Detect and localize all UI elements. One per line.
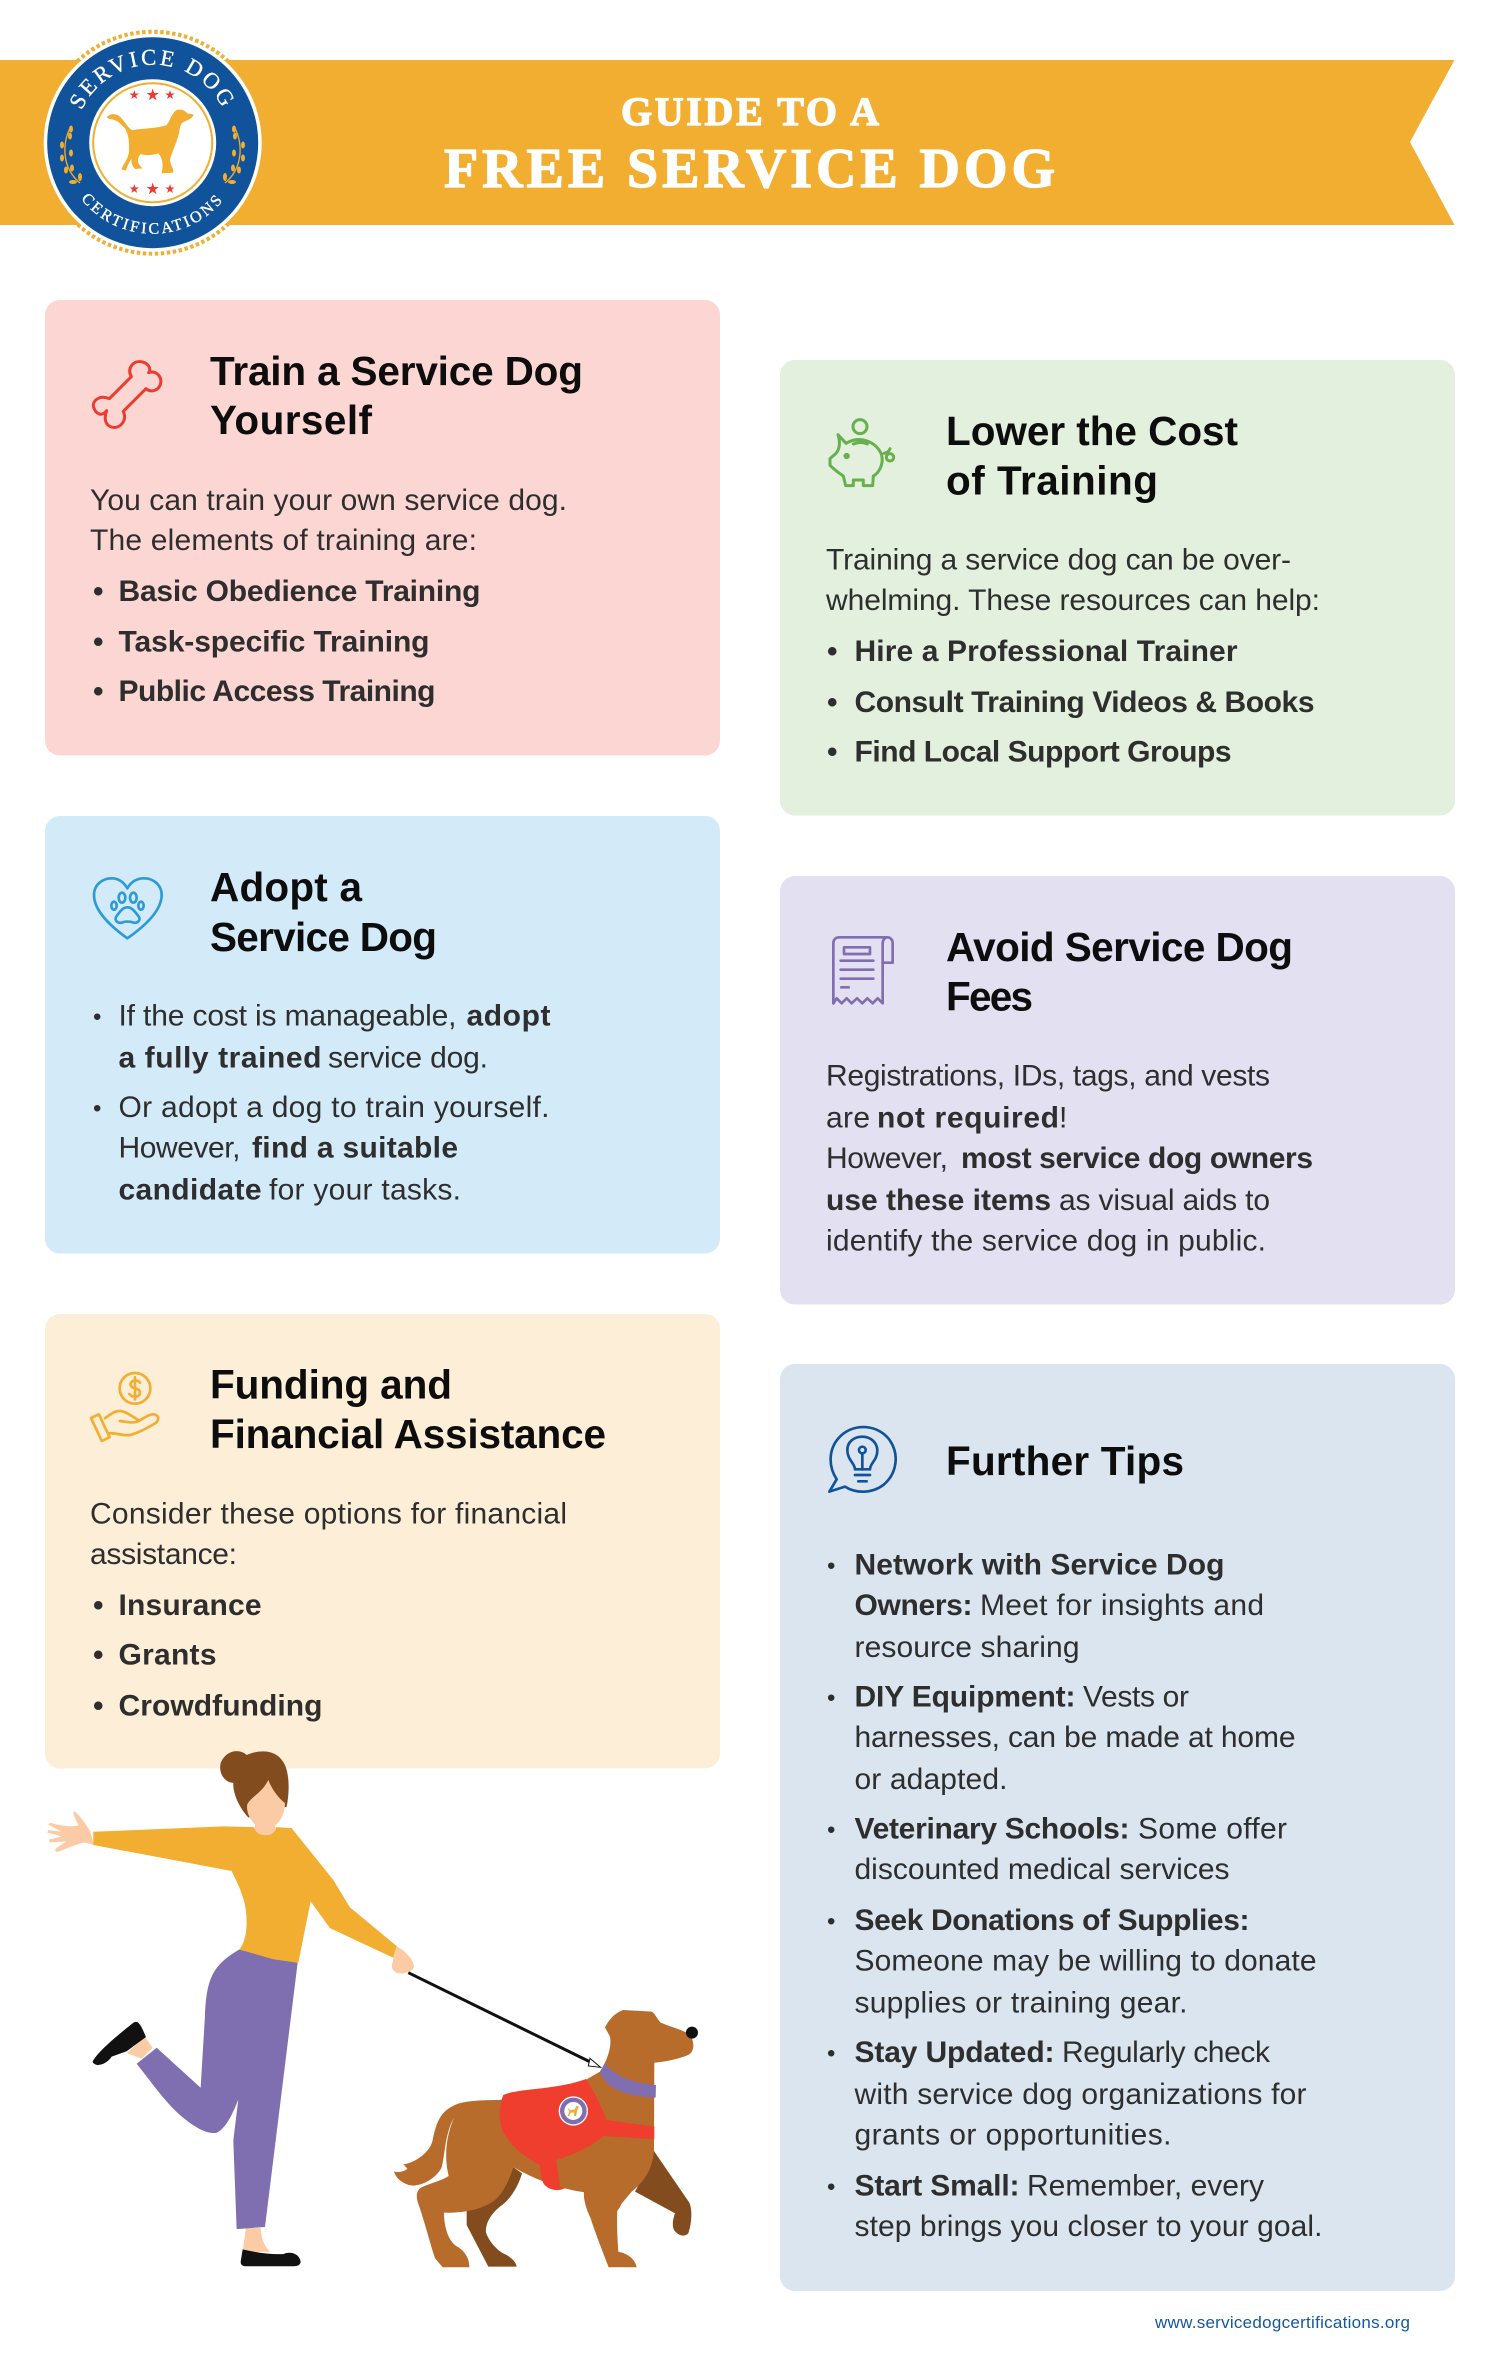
list: adoption options: adopt [466, 1000, 550, 1032]
list: further tips: Someone may be willing to donate [854, 1944, 1316, 1978]
text: fees explanation: However, [826, 1142, 948, 1175]
text: training intro: You can train your own service dog. [90, 484, 567, 517]
heading: lower the cost of training: Lower the Cost [946, 408, 1238, 454]
list: further tips: supplies or training gear. [854, 1986, 1188, 2020]
sweater [93, 1826, 397, 1963]
list: further tips [827, 1548, 1322, 2243]
heading: train a service dog yourself: Train a Service Dog [210, 348, 583, 394]
list: further tips: • [827, 1684, 835, 1712]
list: further tips: • [827, 2174, 835, 2200]
panel: adopt a service dog [45, 816, 720, 1254]
text: financial assistance intro [90, 1498, 567, 1571]
list: adoption options: • [93, 1095, 101, 1122]
panel: further tips [780, 1364, 1455, 2291]
list: adoption options: Or adopt a dog to train yourself. [118, 1091, 550, 1124]
list: adoption options: candidate [118, 1174, 262, 1206]
hair [220, 1751, 289, 1817]
text: fees explanation: not required [877, 1102, 1059, 1134]
vest badge [559, 2096, 588, 2126]
list: funding options: Insurance [118, 1589, 262, 1622]
list: adoption options: If the cost is manageable, [118, 1000, 456, 1032]
face and neck [247, 1780, 285, 1838]
title: FREE SERVICE DOG [444, 138, 1055, 200]
list: elements of training: Task-specific Training [118, 625, 430, 658]
heading: funding and financial assistance [210, 1362, 606, 1457]
heading: lower the cost of training: of Training [946, 458, 1158, 504]
list: funding options: • [93, 1638, 104, 1672]
list: further tips: Seek Donations of Supplies: [854, 1904, 1250, 1937]
text: financial assistance intro: assistance: [90, 1538, 237, 1571]
list: adoption options: • [93, 1004, 101, 1030]
trousers [137, 1950, 298, 2229]
list: further tips: • [827, 1552, 835, 1580]
heading: train a service dog yourself: Yourself [210, 397, 372, 443]
list: further tips: step brings you closer to your goal. [854, 2210, 1322, 2243]
list: further tips: Remember, every [1027, 2170, 1264, 2202]
badge: service dog certifications [44, 30, 262, 256]
list: elements of training: • [93, 575, 104, 608]
list: further tips: • [827, 1908, 835, 1935]
text: fees explanation: most service dog owners [961, 1142, 1313, 1175]
text: fees explanation: ! [1059, 1102, 1067, 1134]
right hand [392, 1946, 414, 1973]
list: further tips: Veterinary Schools: [854, 1812, 1130, 1846]
text: fees explanation: Registrations, IDs, tags, and vests [826, 1060, 1270, 1092]
dog far legs [467, 2150, 691, 2267]
list: further tips: or adapted. [854, 1763, 1008, 1796]
heading: avoid service dog fees [946, 924, 1293, 1020]
icon: piggy bank [830, 420, 894, 486]
list: further tips: Network with Service Dog [854, 1548, 1224, 1582]
list: training resources [827, 635, 1314, 768]
list: further tips: DIY Equipment: [854, 1680, 1076, 1714]
list: elements of training [93, 575, 480, 708]
footer url: www.servicedogcertifications.org [1154, 2313, 1410, 2332]
list: training resources: • [827, 635, 838, 668]
text: training resources intro [825, 544, 1320, 617]
list: further tips: harnesses, can be made at home [854, 1721, 1296, 1754]
heading: adopt a service dog: Service Dog [210, 914, 437, 960]
panel: funding and financial assistance [45, 1314, 720, 1768]
text: fees explanation [826, 1060, 1313, 1258]
list: further tips: Start Small: [854, 2170, 1020, 2202]
list: funding options: • [93, 1589, 104, 1622]
list: further tips: Stay Updated: [854, 2036, 1054, 2069]
panel: avoid service dog fees [780, 876, 1455, 1304]
dog collar [600, 2063, 656, 2098]
list: adoption options: service dog. [328, 1042, 488, 1074]
text: training intro: The elements of training are: [90, 524, 477, 557]
list: training resources: Hire a Professional Trainer [854, 635, 1238, 668]
badge: service dog certifications: SERVICE DOG [70, 50, 234, 109]
badge: service dog certifications: CERTIFICATIONS [82, 194, 222, 234]
heading: adopt a service dog [210, 864, 437, 960]
icon: light bulb speech bubble [829, 1427, 896, 1492]
list: further tips: • [827, 1816, 835, 1844]
heading: funding and financial assistance: Financial Assistance [210, 1411, 606, 1457]
leash [408, 1973, 601, 2067]
dog vest [500, 2079, 654, 2190]
illustration: service dog on leash [394, 1973, 698, 2267]
dog nose [686, 2027, 698, 2039]
list: further tips: resource sharing [854, 1631, 1080, 1664]
left hand [47, 1811, 94, 1852]
text: training resources intro: whelming. These resources can help: [825, 584, 1320, 617]
list: funding options [93, 1589, 322, 1722]
title [444, 89, 1055, 200]
list: further tips: Vests or [1083, 1680, 1189, 1714]
list: elements of training: • [93, 625, 104, 658]
list: funding options: Crowdfunding [118, 1690, 322, 1722]
list: adoption options: However, [118, 1132, 240, 1164]
list: further tips: discounted medical services [854, 1853, 1230, 1886]
text: fees explanation: use these items [826, 1184, 1051, 1217]
text: fees explanation: identify the service dog in public. [826, 1224, 1266, 1258]
list: further tips: grants or opportunities. [854, 2118, 1172, 2152]
panel: lower the cost of training [780, 360, 1455, 816]
text: fees explanation: as visual aids to [1059, 1184, 1270, 1217]
heading: funding and financial assistance: Funding and [210, 1362, 452, 1408]
list: further tips: Owners: [854, 1589, 972, 1622]
icon: heart with paw [94, 878, 162, 938]
shoes [93, 2022, 301, 2266]
list: further tips: Some offer [1138, 1812, 1287, 1846]
heading: train a service dog yourself [210, 348, 583, 443]
list: adoption options: a fully trained [118, 1042, 322, 1074]
leg skin [127, 2037, 271, 2252]
list: further tips: with service dog organizations for [854, 2078, 1306, 2111]
list: funding options: • [93, 1690, 104, 1722]
list: further tips: Meet for insights and [980, 1589, 1264, 1622]
list: further tips: • [827, 2040, 835, 2067]
heading: avoid service dog fees: Fees [946, 974, 1033, 1020]
heading: further tips: Further Tips [946, 1438, 1184, 1484]
list: adoption options: for your tasks. [269, 1174, 461, 1206]
list: further tips: Regularly check [1062, 2036, 1271, 2069]
list: training resources: • [827, 686, 838, 719]
list: elements of training: Public Access Training [118, 675, 436, 708]
banner ribbon [0, 60, 1454, 225]
dog body [394, 2010, 693, 2267]
list: elements of training: • [93, 675, 104, 708]
list: training resources: Find Local Support Groups [854, 736, 1232, 768]
heading: avoid service dog fees: Avoid Service Dog [946, 924, 1293, 970]
title: GUIDE TO A [621, 89, 879, 134]
icon: bone [93, 362, 161, 427]
illustration: woman [47, 1751, 414, 2266]
text: training intro [90, 484, 567, 557]
list: adoption options: find a suitable [252, 1132, 458, 1164]
list: training resources: Consult Training Videos & Books [854, 686, 1314, 719]
icon: receipt [833, 937, 893, 1003]
heading: adopt a service dog: Adopt a [210, 864, 362, 910]
text: training resources intro: Training a service dog can be over- [826, 544, 1291, 576]
list: elements of training: Basic Obedience Training [118, 575, 480, 608]
list: funding options: Grants [118, 1638, 216, 1672]
text: fees explanation: are [826, 1102, 870, 1134]
list: training resources: • [827, 736, 838, 768]
list: adoption options [93, 1000, 550, 1206]
icon: hand with coin [91, 1373, 158, 1441]
panel: train a service dog yourself [45, 300, 720, 756]
text: financial assistance intro: Consider these options for financial [90, 1498, 567, 1530]
heading: lower the cost of training [946, 408, 1238, 504]
